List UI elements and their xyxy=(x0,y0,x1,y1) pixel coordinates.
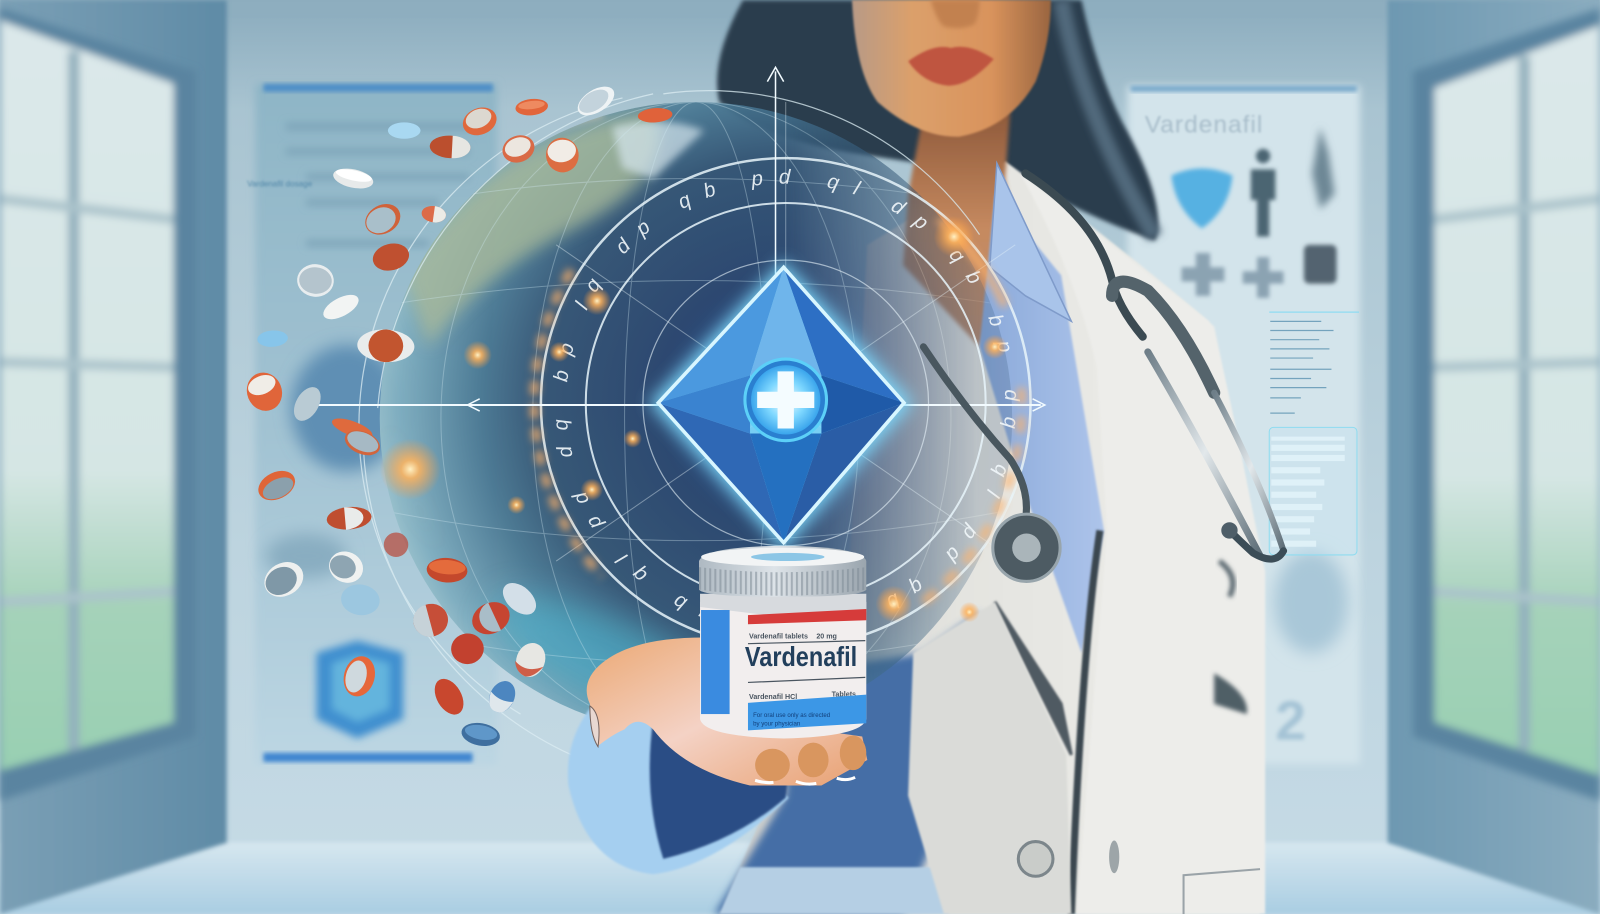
icon: human figure xyxy=(1251,149,1275,237)
icon: human figure small xyxy=(1312,128,1335,209)
metal arm left xyxy=(1148,352,1260,556)
poster title: Vardenafil xyxy=(1145,112,1263,139)
coat lapel xyxy=(1020,173,1265,914)
dial rings xyxy=(541,102,1031,648)
coat body xyxy=(719,161,1260,914)
left window xyxy=(0,8,196,801)
vardenafil jar: Tablets xyxy=(832,691,856,699)
coat side shadows xyxy=(1214,673,1247,714)
jar lid xyxy=(699,546,866,597)
vardenafil jar xyxy=(699,546,866,739)
icons: plus signs xyxy=(1182,253,1284,298)
sleeve cuff xyxy=(568,694,789,874)
diamond outline xyxy=(658,267,904,543)
hair xyxy=(717,0,1158,241)
tube: yoke xyxy=(1112,282,1214,393)
vardenafil jar: For oral use only as directed xyxy=(753,712,830,719)
facet: lower left xyxy=(658,403,784,543)
small label text: Vardenafil tablets xyxy=(749,633,808,641)
globe sphere xyxy=(380,102,1012,756)
lapel shadow xyxy=(995,602,1071,755)
left blurred poster xyxy=(247,84,497,765)
navy inner cuff xyxy=(650,719,791,859)
lips xyxy=(908,47,994,86)
plus sign xyxy=(757,371,814,428)
outer orbit rings xyxy=(359,91,980,755)
facet: bottom centre xyxy=(750,434,821,543)
right blurred poster xyxy=(1127,86,1360,764)
floor xyxy=(0,843,1600,914)
lid top xyxy=(701,548,864,566)
facet: lower right xyxy=(784,403,904,543)
chest tube xyxy=(923,347,1026,520)
finger nails xyxy=(755,777,855,784)
facet: right xyxy=(821,375,904,434)
holographic globe xyxy=(318,66,1046,754)
glow spots xyxy=(380,216,1007,622)
palm xyxy=(587,638,867,785)
stethoscope xyxy=(923,173,1284,581)
blue label band xyxy=(748,695,866,730)
facet: top left xyxy=(658,267,784,403)
thumb nail xyxy=(590,706,599,747)
facet: top right xyxy=(784,267,904,403)
floating pills xyxy=(241,81,673,749)
poster caption: Vardenafil dosage xyxy=(247,180,313,189)
holographic data panels xyxy=(1269,312,1359,555)
face xyxy=(852,0,1051,137)
facet: top centre xyxy=(750,267,821,375)
right side wall xyxy=(1388,0,1600,914)
coat edge shadow xyxy=(1071,530,1100,914)
vardenafil jar: 20 mg xyxy=(816,633,837,641)
left side wall xyxy=(0,0,227,914)
tube end xyxy=(1229,530,1284,559)
fingertips xyxy=(755,735,866,781)
meridians xyxy=(380,102,1010,734)
red stripe xyxy=(748,609,866,624)
coat button small xyxy=(1109,841,1119,873)
icon: shield xyxy=(1171,168,1233,228)
earpiece xyxy=(1221,522,1238,539)
emblem glow xyxy=(649,260,913,551)
pocket xyxy=(1184,869,1260,914)
land masses xyxy=(403,110,660,347)
nose xyxy=(931,0,980,28)
orange light band xyxy=(534,219,1022,602)
metal arm right xyxy=(1214,393,1284,551)
label rules xyxy=(748,641,865,682)
coat button xyxy=(1018,842,1053,876)
right window xyxy=(1413,8,1600,801)
shirt xyxy=(980,194,1104,653)
vardenafil jar: by your physician xyxy=(753,720,800,727)
hand xyxy=(587,638,867,785)
product name: Vardenafil xyxy=(745,641,857,672)
lower coat panel xyxy=(719,867,949,914)
neck xyxy=(903,112,1020,347)
blue side label xyxy=(701,610,730,714)
jar shoulder xyxy=(700,594,866,617)
doctor figure xyxy=(714,0,1265,914)
diamond emblem xyxy=(649,260,913,551)
axis lines xyxy=(306,67,1045,411)
dosage text: Vardenafil HCl xyxy=(749,693,797,701)
icon: medical bag xyxy=(1304,245,1337,284)
tube: neck xyxy=(1025,173,1143,337)
navy sleeve xyxy=(714,612,980,914)
centre lens xyxy=(745,359,827,441)
facet: left xyxy=(658,375,750,434)
jar body xyxy=(700,602,866,739)
shirt collar xyxy=(990,163,1071,321)
chestpiece xyxy=(993,514,1060,581)
poster numeral: 2 xyxy=(1275,690,1306,752)
